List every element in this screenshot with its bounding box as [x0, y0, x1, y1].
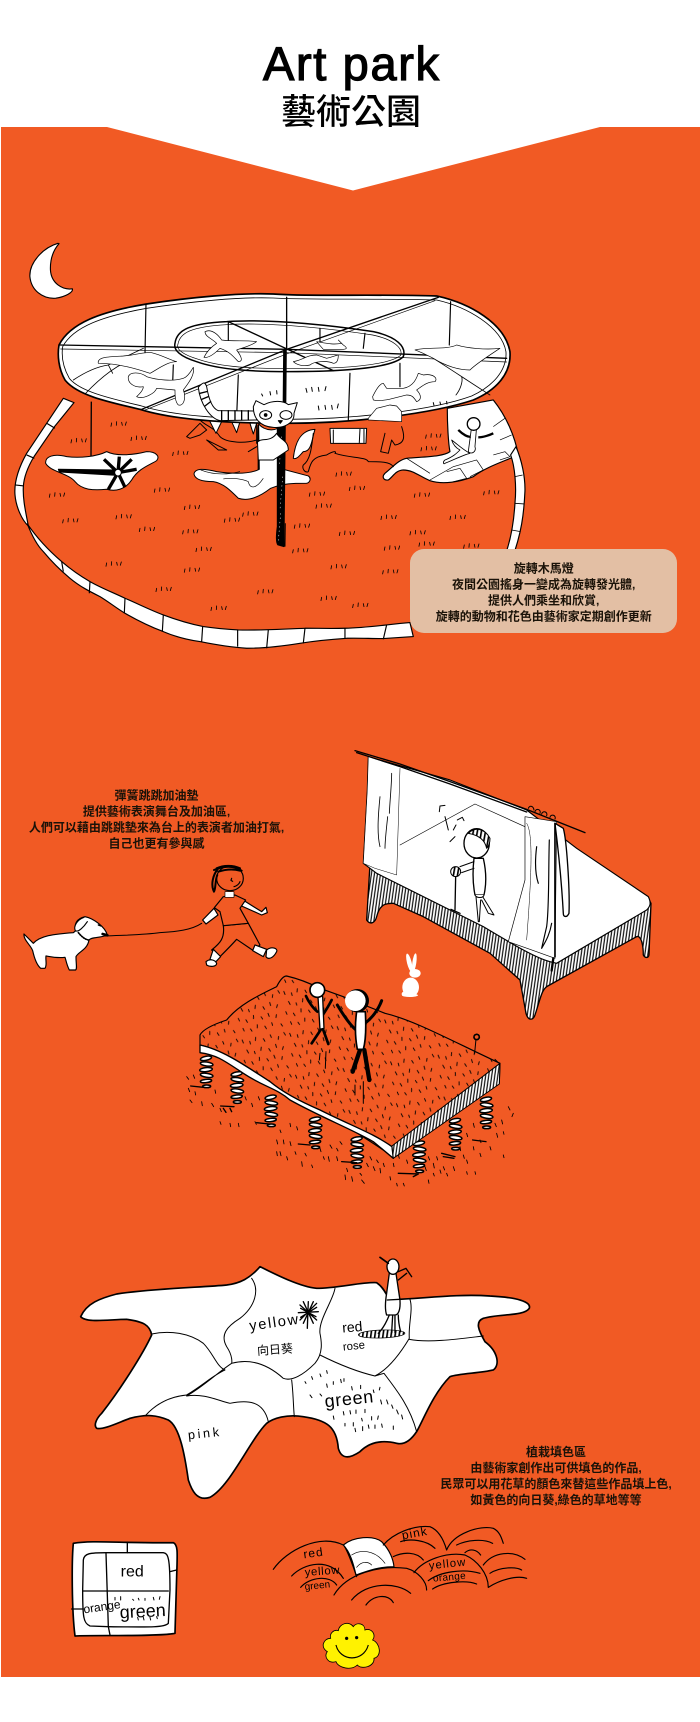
right curtain — [508, 817, 557, 958]
caption box: carousel — [410, 549, 677, 633]
title: Art park — [263, 37, 440, 90]
cat — [198, 383, 297, 427]
square colouring plot: red — [121, 1564, 144, 1581]
caption: planting area — [440, 1444, 672, 1507]
hills colouring plot: green — [304, 1579, 331, 1593]
mat edge — [200, 1045, 393, 1158]
icon: dog — [24, 917, 107, 970]
caption: trampoline: 提供藝術表演舞台及加油區, — [83, 804, 230, 818]
icon: crescent moon — [30, 243, 72, 298]
icon: sunflower scribble — [298, 1302, 318, 1328]
icon: girl — [203, 866, 277, 966]
caption: trampoline: 彈簧跳跳加油墊 — [114, 788, 199, 802]
handwritten labels: pink — [187, 1425, 222, 1442]
animals inside canopy — [98, 331, 500, 422]
handwritten labels: rose — [342, 1339, 366, 1354]
curtain rod — [355, 751, 585, 833]
square colouring plot: orange — [82, 1597, 122, 1616]
handwritten labels: 向日葵 — [256, 1341, 293, 1358]
right band and rider blob — [383, 400, 525, 560]
caption box: carousel: 夜間公園搖身一變成為旋轉發光體, — [452, 576, 635, 592]
stage floor and backdrop — [363, 757, 650, 963]
caption box: carousel: 旋轉木馬燈 — [514, 560, 574, 576]
caption box: carousel: 旋轉的動物和花色由藝術家定期創作更新 — [436, 608, 652, 624]
title — [263, 37, 440, 132]
grass tufts — [49, 422, 499, 611]
handwritten labels: red — [342, 1318, 363, 1336]
caption: trampoline — [29, 788, 284, 850]
hills colouring plot: pink — [401, 1524, 429, 1542]
trampoline scene — [187, 976, 513, 1186]
stage skirt — [367, 864, 651, 1019]
hills colouring plot — [273, 1524, 527, 1605]
icon: rabbit — [402, 953, 421, 997]
stage scene — [355, 751, 651, 1019]
handwritten labels: yellow — [248, 1312, 301, 1335]
leash — [105, 923, 202, 936]
hills colouring plot: yellow — [428, 1556, 467, 1572]
handwritten labels — [187, 1312, 375, 1442]
caption: planting area: 如黃色的向日葵,綠色的草地等等 — [470, 1492, 642, 1507]
hills colouring plot: yellow — [304, 1565, 341, 1579]
handwritten labels: green — [324, 1386, 375, 1411]
carousel canopy — [58, 294, 510, 472]
title: 藝術公園 — [281, 93, 421, 132]
ground marks — [187, 1075, 513, 1186]
springs — [199, 1055, 213, 1088]
planting colouring area map — [81, 1267, 530, 1498]
caption: planting area: 民眾可以用花草的顏色來替這些作品填上色, — [440, 1476, 672, 1491]
mat — [200, 976, 500, 1157]
girl walking dog — [24, 866, 277, 970]
singer — [439, 805, 494, 922]
hills colouring plot: red — [302, 1545, 325, 1561]
hills colouring plot: orange — [433, 1571, 467, 1585]
square colouring plot — [72, 1542, 177, 1636]
caption box: carousel: 提供人們乘坐和欣賞, — [488, 592, 599, 608]
caption: planting area: 由藝術家創作出可供填色的作品, — [470, 1460, 642, 1475]
carousel scene — [15, 294, 525, 648]
hanging flower blobs and pole — [46, 402, 310, 547]
jumpers — [306, 983, 382, 1103]
caption: trampoline: 人們可以藉由跳跳墊來為台上的表演者加油打氣, — [29, 820, 284, 834]
figure with pickaxe on map — [358, 1257, 412, 1339]
caption: planting area: 植栽填色區 — [526, 1444, 586, 1459]
winding path band — [15, 398, 413, 648]
cat and horse below canopy — [187, 420, 404, 472]
square colouring plot: green — [119, 1600, 166, 1622]
left curtain — [363, 757, 400, 875]
caption: trampoline: 自己也更有參與感 — [108, 836, 205, 850]
icon: smiley flower — [323, 1623, 379, 1668]
